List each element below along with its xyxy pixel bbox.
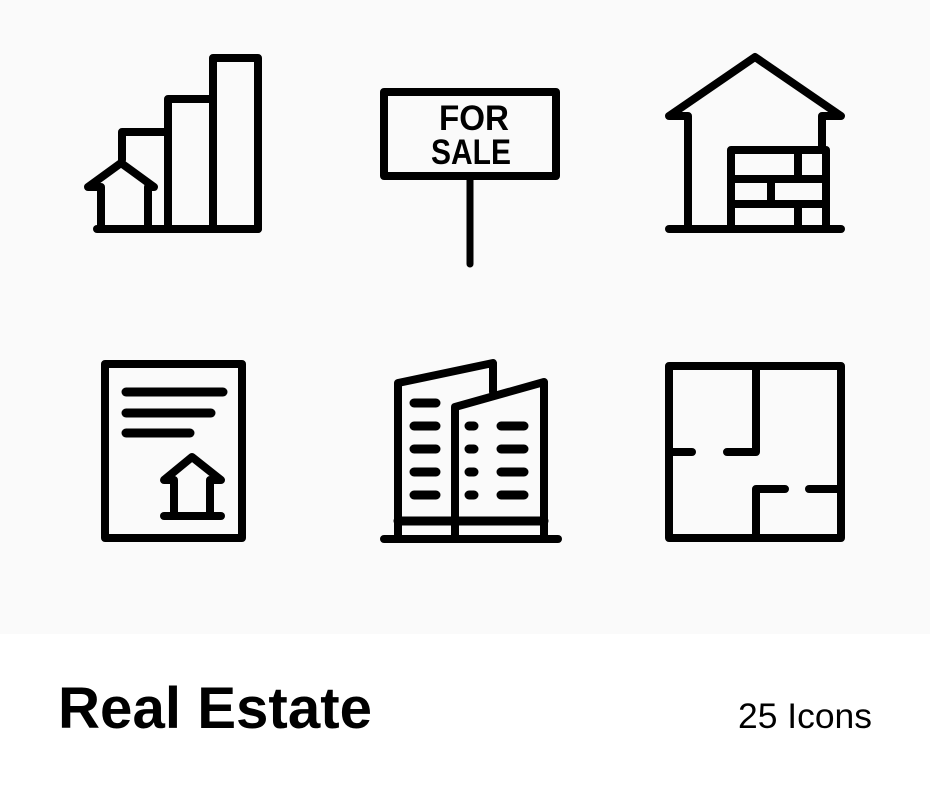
icon: floor plan <box>669 366 841 538</box>
icon: property document <box>105 364 242 538</box>
icon: bar chart with house <box>88 58 258 229</box>
icon: for sale sign: FOR <box>439 99 509 138</box>
title: Real Estate <box>58 676 372 741</box>
subtitle: icon count: 25 Icons <box>738 697 872 736</box>
icon: garage <box>669 57 841 229</box>
icon: for sale sign <box>384 92 556 264</box>
icon: for sale sign: SALE <box>431 133 511 172</box>
icon: office buildings <box>384 363 558 539</box>
